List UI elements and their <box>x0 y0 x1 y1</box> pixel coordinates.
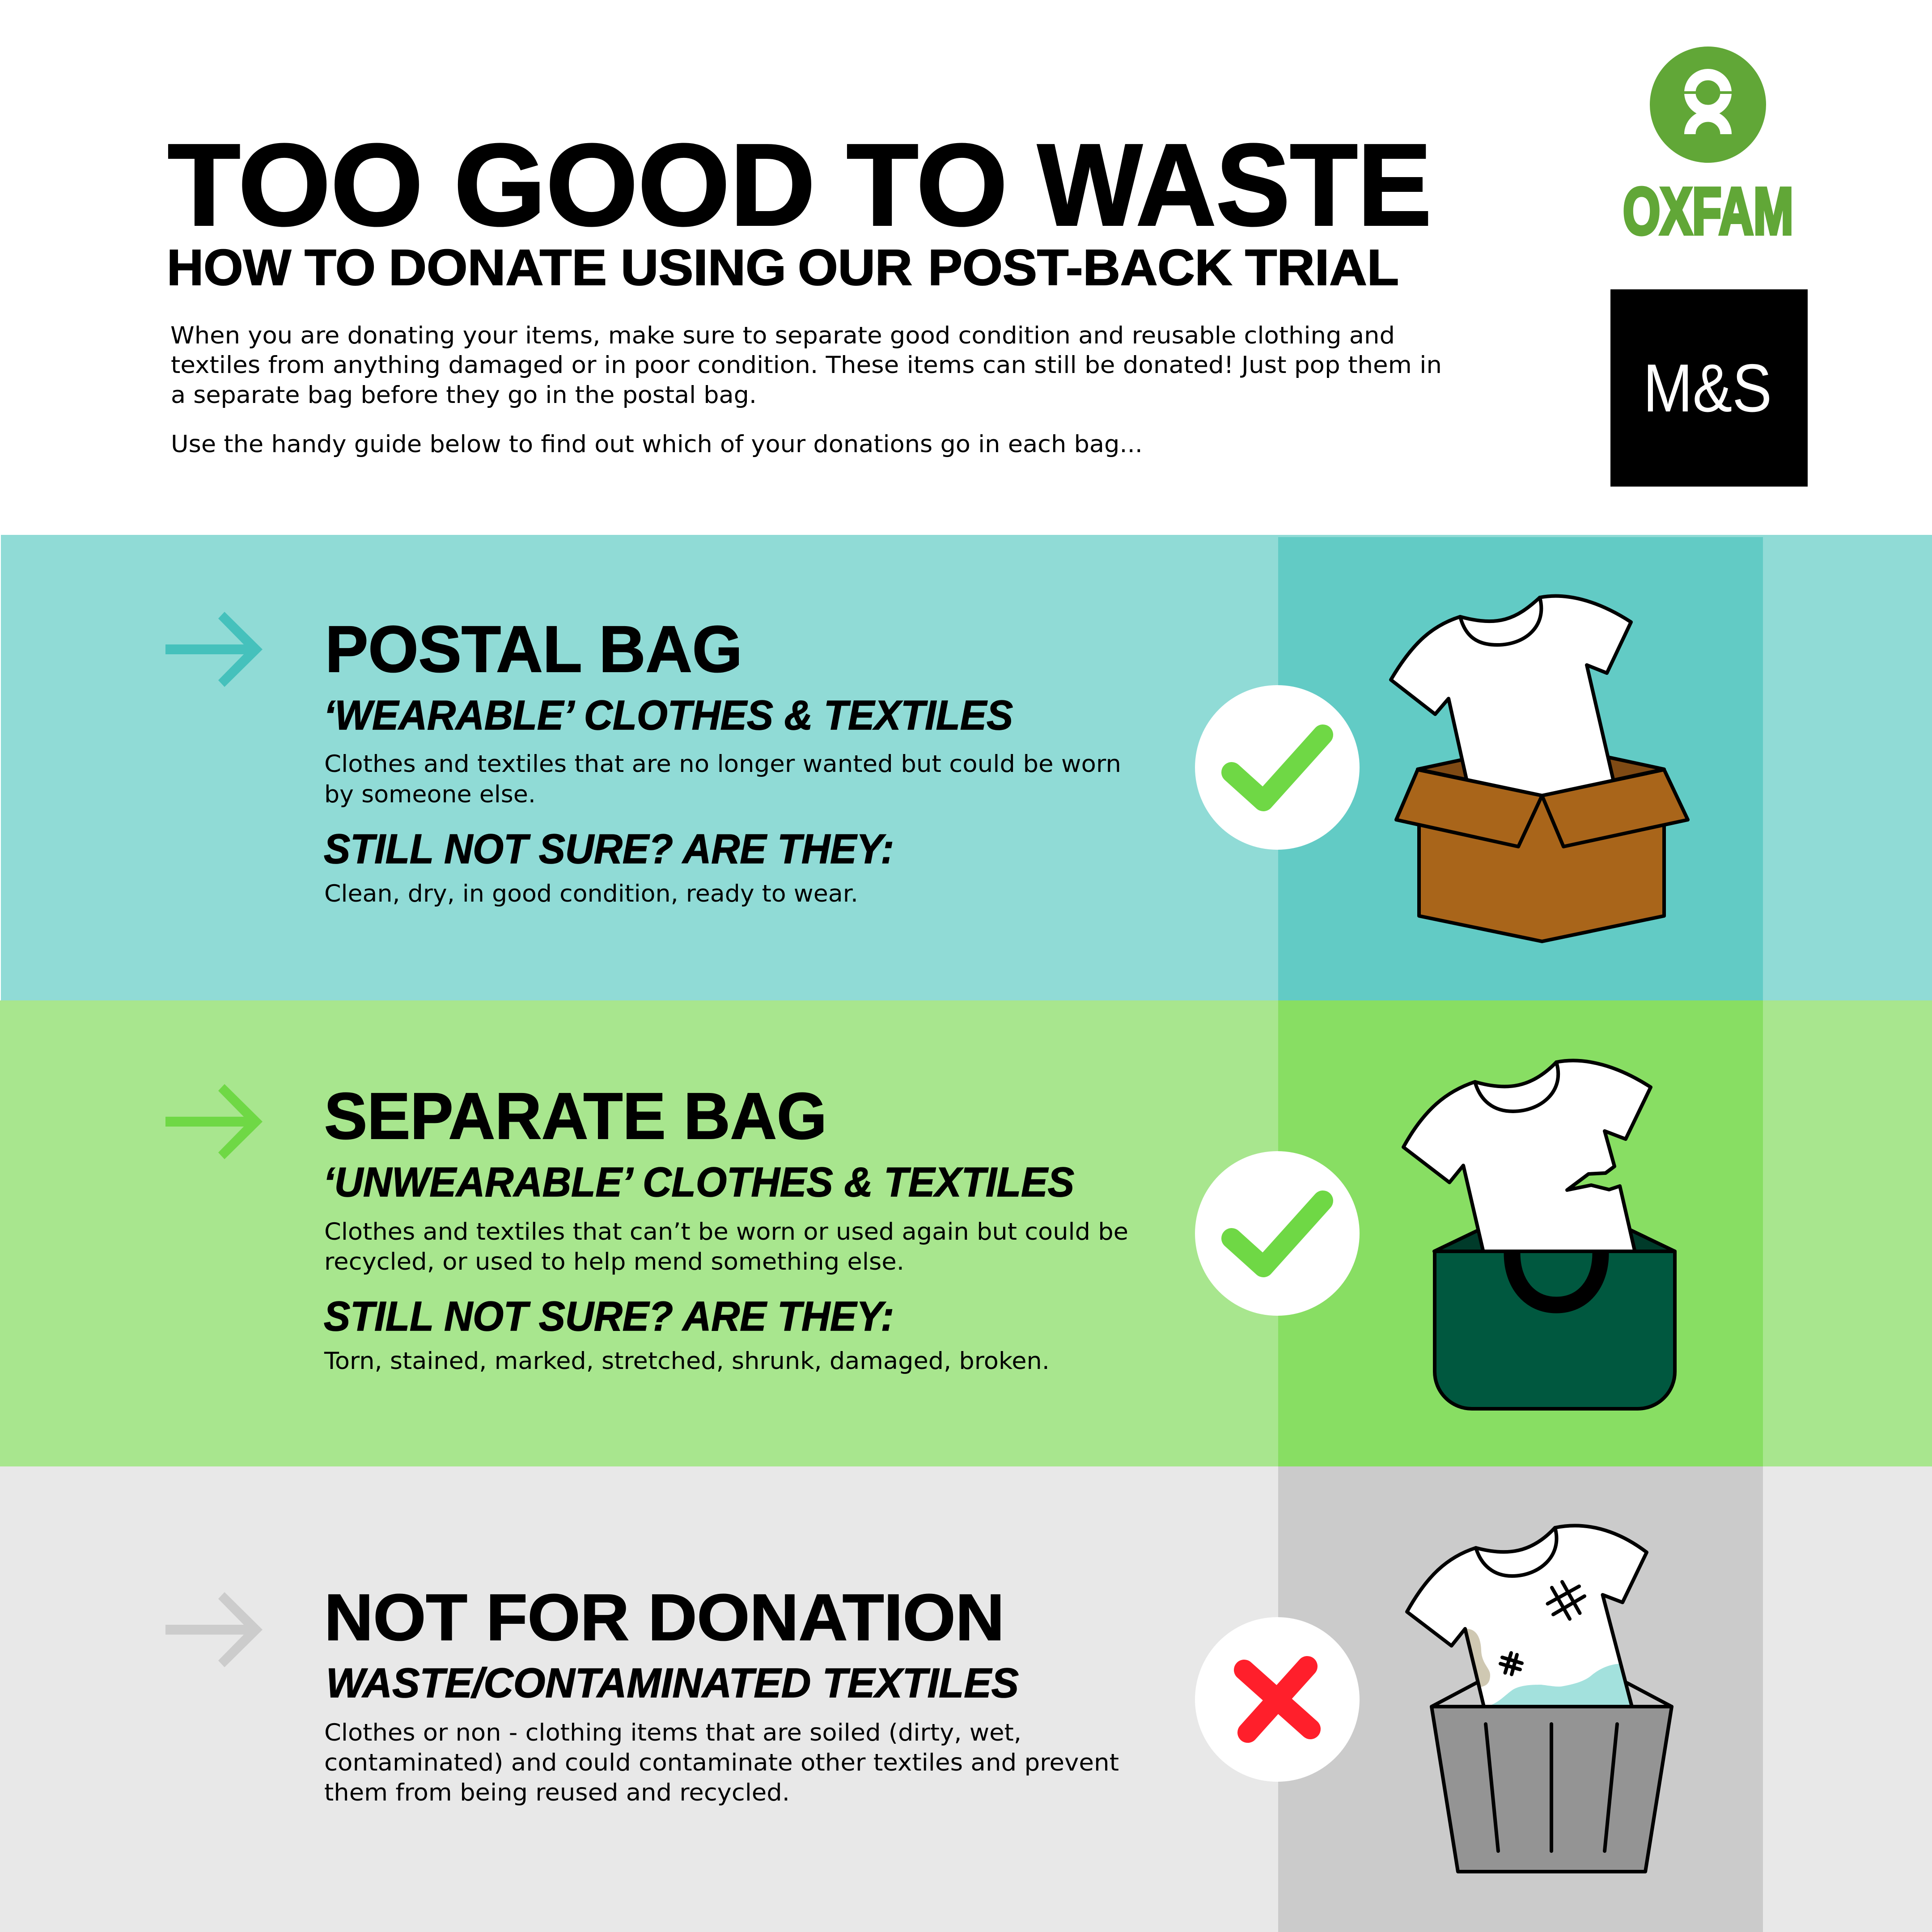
title <box>168 120 1432 250</box>
text block: separate bag: Clothes and textiles that can’t be worn or used again but could be <box>324 1218 1128 1246</box>
intro text block: a separate bag before they go in the postal bag. <box>171 381 757 409</box>
text block: postal bag: Clean, dry, in good condition, ready to wear. <box>324 880 858 907</box>
logo: Oxfam: OXFAM <box>1623 174 1793 248</box>
subtitle: USING <box>621 239 786 296</box>
illustration: t-shirt in cardboard box <box>1391 596 1688 941</box>
text block: separate bag: STILL NOT SURE? ARE THEY: <box>324 1293 894 1339</box>
subtitle: HOW <box>167 239 291 296</box>
text block: postal bag <box>324 613 1121 907</box>
subtitle: POST-BACK <box>928 239 1232 296</box>
text block: separate bag <box>323 1080 1128 1375</box>
intro text block: textiles from anything damaged or in poor condition. These items can still be donated! Just pop them in <box>171 352 1442 379</box>
intro text block <box>170 322 1442 458</box>
text block: separate bag: SEPARATE BAG <box>324 1080 827 1153</box>
intro text block: Use the handy guide below to find out which of your donations go in each bag... <box>171 431 1143 458</box>
arrow: separate bag <box>165 1084 263 1159</box>
title: WASTE <box>1038 120 1432 250</box>
intro text block: When you are donating your items, make sure to separate good condition and reusable clothing and <box>170 322 1395 349</box>
logo: M&S <box>1610 289 1808 487</box>
text block: postal bag: ‘WEARABLE’ CLOTHES & TEXTILES <box>324 692 1013 738</box>
subtitle: OUR <box>798 239 912 296</box>
icon: green tick <box>1195 685 1360 850</box>
text block: separate bag: Torn, stained, marked, stretched, shrunk, damaged, broken. <box>324 1347 1050 1375</box>
illustration: soiled t-shirt in waste bin <box>1407 1525 1672 1872</box>
arrow: postal bag <box>165 612 263 687</box>
logo: M&S: M&S <box>1643 350 1772 426</box>
text block: not for donation: them from being reused and recycled. <box>324 1779 790 1806</box>
arrow: not for donation <box>165 1592 263 1667</box>
text block: postal bag: Clothes and textiles that are no longer wanted but could be worn <box>324 750 1121 778</box>
text block: separate bag: ‘UNWEARABLE’ CLOTHES & TEXTILES <box>323 1159 1074 1205</box>
subtitle: TRIAL <box>1245 239 1399 296</box>
icon: red cross <box>1195 1617 1360 1782</box>
subtitle: DONATE <box>389 239 607 296</box>
text block: separate bag: recycled, or used to help mend something else. <box>324 1248 904 1275</box>
text block: not for donation: contaminated) and could contaminate other textiles and prevent <box>324 1749 1119 1776</box>
panel: not for donation background <box>0 1466 1932 1932</box>
illustration: torn t-shirt in green bag <box>1403 1060 1675 1409</box>
text block: not for donation: Clothes or non - clothing items that are soiled (dirty, wet, <box>324 1719 1021 1746</box>
panel: separate bag background <box>0 1000 1932 1466</box>
icon: green tick <box>1195 1151 1360 1316</box>
text block: postal bag: by someone else. <box>324 781 536 808</box>
title: TO <box>847 120 1008 250</box>
subtitle <box>167 239 1399 296</box>
subtitle: TO <box>305 239 376 296</box>
text block: not for donation: NOT FOR DONATION <box>324 1581 1004 1654</box>
title: TOO <box>168 120 423 250</box>
text block: not for donation: WASTE/CONTAMINATED TEXTILES <box>326 1660 1019 1706</box>
text block: postal bag: POSTAL BAG <box>325 613 742 686</box>
text block: not for donation <box>324 1581 1119 1806</box>
panel: postal bag background <box>1 535 1932 1000</box>
title: GOOD <box>454 120 815 250</box>
text block: postal bag: STILL NOT SURE? ARE THEY: <box>324 826 894 872</box>
logo: Oxfam <box>1623 47 1793 248</box>
